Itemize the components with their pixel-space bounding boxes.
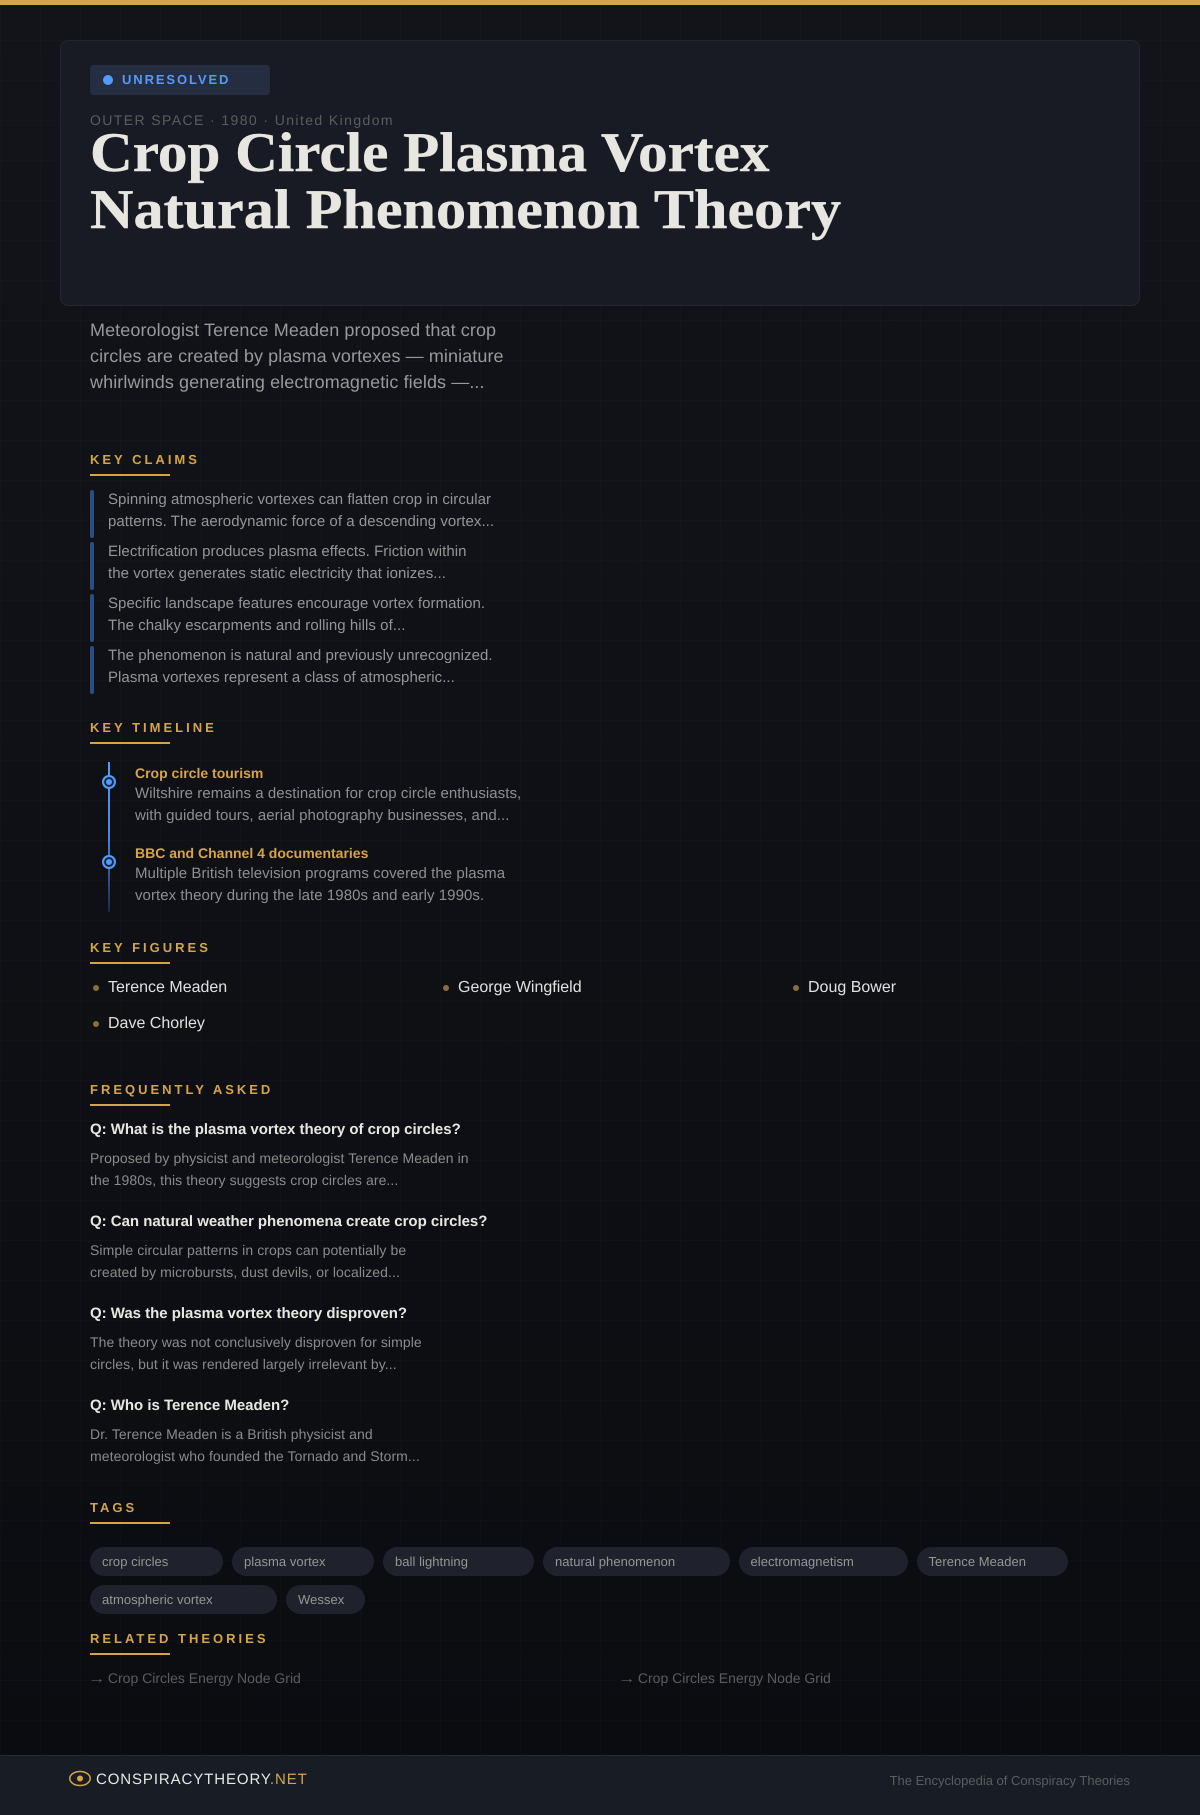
faq 3: Q: Was the plasma vortex theory disproven? — [90, 1305, 407, 1322]
tag list — [90, 1547, 1068, 1614]
tag — [738, 1547, 908, 1576]
icon: timeline node 1 — [102, 775, 116, 789]
faq 4: Dr. Terence Meaden is a British physicist and — [90, 1426, 373, 1442]
section: key timeline — [90, 720, 521, 912]
brand name: CONSPIRACYTHEORY.NET — [96, 1771, 308, 1788]
heading: key claims: KEY CLAIMS — [90, 452, 200, 467]
claim 4 — [90, 646, 493, 694]
related link 1: Crop Circles Energy Node Grid — [108, 1670, 301, 1686]
tag — [90, 1585, 277, 1614]
related link 2: Crop Circles Energy Node Grid — [638, 1670, 831, 1686]
faq 3 — [90, 1305, 422, 1372]
faq 1: Q: What is the plasma vortex theory of crop circles? — [90, 1121, 461, 1138]
figure: Dave Chorley: Dave Chorley — [108, 1015, 205, 1032]
heading: key timeline: KEY TIMELINE — [90, 720, 217, 735]
related link 1: → — [88, 1670, 106, 1686]
section: key figures — [90, 940, 896, 1032]
faq 3: The theory was not conclusively disproven for simple — [90, 1334, 422, 1350]
event 2: BBC and Channel 4 documentaries — [135, 845, 368, 861]
footer — [0, 1755, 1200, 1815]
tag — [90, 1547, 223, 1576]
heading: key figures: KEY FIGURES — [90, 940, 211, 955]
claim 4: The phenomenon is natural and previously unrecognized. — [108, 647, 493, 664]
claim 1: Spinning atmospheric vortexes can flatten crop in circular — [108, 491, 491, 508]
tag: electromagnetism — [750, 1554, 854, 1569]
claim 2: Electrification produces plasma effects. Friction within — [108, 543, 467, 560]
event 1 — [135, 765, 521, 824]
title: Natural Phenomenon Theory — [90, 179, 841, 241]
meta line: OUTER SPACE · 1980 · United Kingdom — [90, 112, 394, 128]
tag: natural phenomenon — [555, 1554, 675, 1569]
status badge — [90, 65, 270, 95]
tag: plasma vortex — [244, 1554, 326, 1569]
related link 2: → — [618, 1670, 636, 1686]
event 1: Wiltshire remains a destination for crop circle enthusiasts, — [135, 785, 521, 802]
timeline rail — [108, 762, 110, 912]
tag: crop circles — [102, 1554, 168, 1569]
faq 4: Q: Who is Terence Meaden? — [90, 1397, 289, 1414]
section: key claims — [90, 452, 494, 694]
faq 2: Simple circular patterns in crops can potentially be — [90, 1242, 406, 1258]
badge label: UNRESOLVED — [122, 72, 230, 87]
tag: atmospheric vortex — [102, 1592, 213, 1607]
tagline: The Encyclopedia of Conspiracy Theories — [890, 1773, 1130, 1788]
event 1: Crop circle tourism — [135, 765, 263, 781]
heading: frequently asked: FREQUENTLY ASKED — [90, 1082, 273, 1097]
claim 4: Plasma vortexes represent a class of atmospheric... — [108, 669, 455, 686]
section: frequently asked — [90, 1082, 487, 1464]
claim 3 — [90, 594, 485, 642]
tag — [383, 1547, 534, 1576]
event 1: with guided tours, aerial photography businesses, and... — [135, 807, 509, 824]
faq 1: Proposed by physicist and meteorologist Terence Meaden in — [90, 1150, 469, 1166]
tag: Wessex — [298, 1592, 344, 1607]
tag — [543, 1547, 730, 1576]
heading: tags: TAGS — [90, 1500, 137, 1515]
tag — [232, 1547, 374, 1576]
faq 1: the 1980s, this theory suggests crop circles are... — [90, 1172, 398, 1188]
faq 1 — [90, 1121, 469, 1188]
tag: Terence Meaden — [928, 1554, 1026, 1569]
icon: status dot — [103, 75, 113, 85]
heading: related theories: RELATED THEORIES — [90, 1631, 268, 1646]
icon: timeline node 2 — [102, 855, 116, 869]
event 2 — [135, 845, 506, 904]
panel: hero header — [60, 40, 1140, 306]
figure: Terence Meaden: Terence Meaden — [108, 979, 227, 996]
claim 1 — [90, 490, 494, 538]
faq 2 — [90, 1213, 487, 1280]
icon: eye logo — [69, 1770, 91, 1786]
claim 3: Specific landscape features encourage vortex formation. — [108, 595, 485, 612]
title: Crop Circle Plasma Vortex — [90, 122, 769, 184]
faq 4 — [90, 1397, 420, 1464]
intro text: Meteorologist Terence Meaden proposed that crop — [90, 320, 496, 340]
figure: George Wingfield: George Wingfield — [458, 979, 582, 996]
faq 3: circles, but it was rendered largely irrelevant by... — [90, 1356, 397, 1372]
intro text: whirlwinds generating electromagnetic fields —... — [90, 372, 485, 392]
figure: Doug Bower: Doug Bower — [808, 979, 896, 996]
intro text: circles are created by plasma vortexes — miniature — [90, 346, 504, 366]
claim 3: The chalky escarpments and rolling hills of... — [108, 617, 405, 634]
tag — [286, 1585, 365, 1614]
event 2: Multiple British television programs covered the plasma — [135, 865, 505, 882]
title — [90, 122, 841, 241]
faq 2: created by microbursts, dust devils, or localized... — [90, 1264, 400, 1280]
event 2: vortex theory during the late 1980s and early 1990s. — [135, 887, 484, 904]
top accent bar — [0, 0, 1200, 5]
faq 2: Q: Can natural weather phenomena create crop circles? — [90, 1213, 487, 1230]
claim 2: the vortex generates static electricity that ionizes... — [108, 565, 446, 582]
intro text — [90, 320, 504, 392]
claim 1: patterns. The aerodynamic force of a descending vortex... — [108, 513, 494, 530]
tag: ball lightning — [395, 1554, 468, 1569]
tag — [916, 1547, 1068, 1576]
faq 4: meteorologist who founded the Tornado and Storm... — [90, 1448, 420, 1464]
claim 2 — [90, 542, 467, 590]
